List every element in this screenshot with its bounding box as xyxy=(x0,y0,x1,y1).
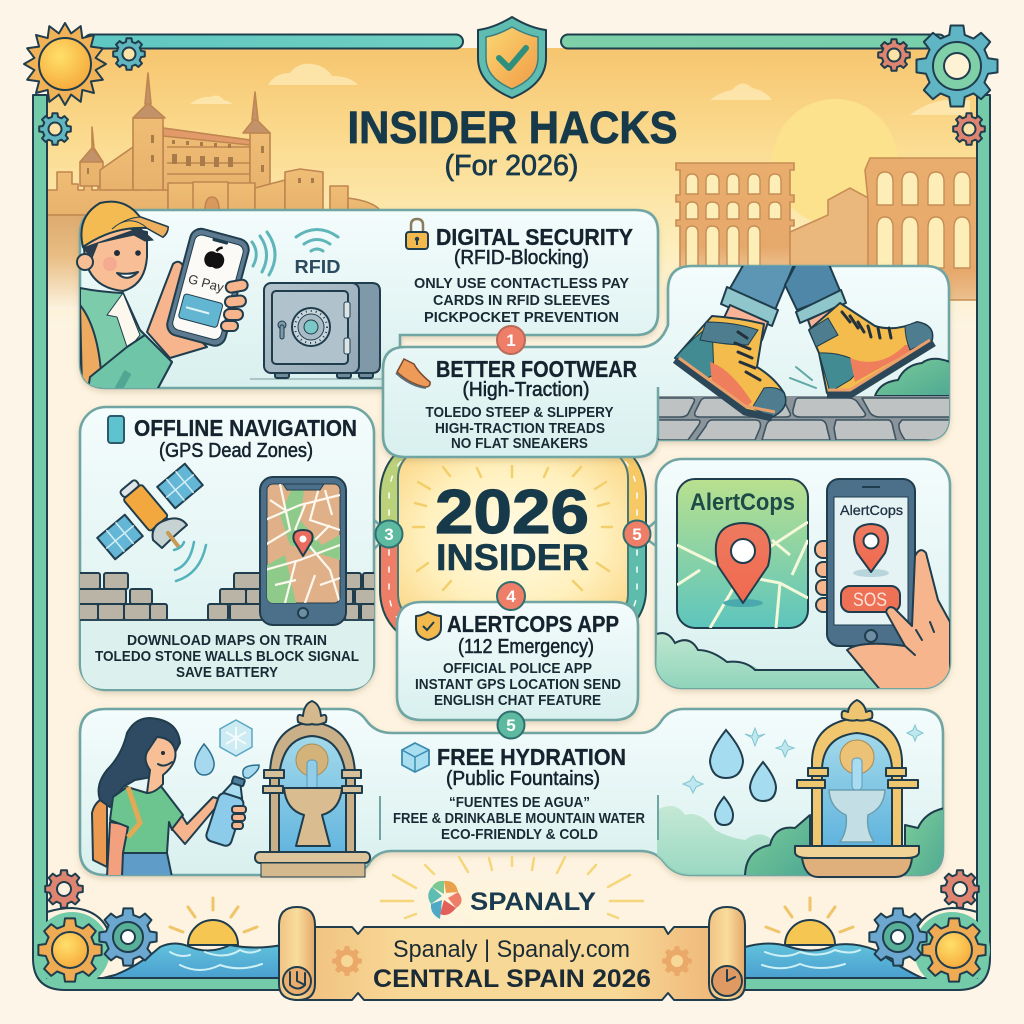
panel: offline navigation xyxy=(78,407,377,690)
apple logo xyxy=(203,244,228,270)
top left bar xyxy=(84,34,463,48)
pinwheel logo xyxy=(428,881,462,919)
pointing hand xyxy=(847,550,950,692)
heading: BETTER FOOTWEAR xyxy=(436,356,637,382)
phone label: AlertCops xyxy=(840,502,903,518)
icon: teal gear top xyxy=(113,38,145,70)
icon: sneaker xyxy=(396,359,430,388)
rays xyxy=(413,466,612,590)
scene: hiking boots on cobblestones xyxy=(655,262,951,442)
lower tint xyxy=(81,620,373,689)
heading: DIGITAL SECURITY xyxy=(436,224,633,250)
title: INSIDER HACKS xyxy=(348,102,678,153)
panel: free hydration xyxy=(80,700,945,877)
panel: center hub xyxy=(389,448,637,632)
body copy: ONLY USE CONTACTLESS PAY xyxy=(414,275,629,292)
body copy: ENGLISH CHAT FEATURE xyxy=(434,692,601,709)
icon: shield check xyxy=(416,612,441,640)
step badge 1 xyxy=(497,326,525,354)
inner cream panel background xyxy=(47,300,977,980)
footer site line: Spanaly | Spanaly.com xyxy=(393,936,630,963)
front boot xyxy=(809,303,932,393)
yellow centre xyxy=(398,448,628,624)
right roll xyxy=(709,907,745,1000)
heading: FREE HYDRATION xyxy=(437,744,626,770)
subtitle: (For 2026) xyxy=(444,150,578,182)
fountain left xyxy=(255,701,370,877)
footer scroll banner xyxy=(279,907,745,1000)
traveler with phone xyxy=(77,202,251,390)
brand name: SPANALY xyxy=(470,888,596,916)
step badge 5 lower xyxy=(498,712,524,738)
gears xyxy=(941,870,979,908)
sparkles xyxy=(683,725,923,793)
panel: alertcops illustration xyxy=(656,459,950,692)
contactless waves xyxy=(252,232,275,275)
backpack xyxy=(92,797,107,867)
RFID label: RFID xyxy=(294,257,340,277)
body copy: FREE & DRINKABLE MOUNTAIN WATER xyxy=(393,810,645,827)
water drops and snow hexagon xyxy=(195,720,259,778)
water bottle xyxy=(205,776,246,847)
face xyxy=(146,737,176,793)
glow and rays xyxy=(377,863,647,947)
Toledo Alcazar castle xyxy=(47,73,380,215)
body copy: DOWNLOAD MAPS ON TRAIN xyxy=(127,632,327,649)
icon: sun top left xyxy=(24,23,106,105)
Segovia aqueduct xyxy=(676,158,977,300)
subheading: (Public Fountains) xyxy=(446,768,600,790)
safe xyxy=(250,283,384,379)
stone walls xyxy=(78,573,377,620)
right arm xyxy=(172,797,222,844)
pin large xyxy=(723,599,763,607)
shirt xyxy=(110,785,183,853)
half sun with rays xyxy=(785,920,835,945)
right bar and bottom right corner xyxy=(720,95,990,990)
heading: OFFLINE NAVIGATION xyxy=(134,415,357,441)
left bar and bottom left corner xyxy=(33,95,300,990)
step badge 5 lower: 5 xyxy=(506,716,516,735)
body copy xyxy=(426,404,614,452)
step badge 4 xyxy=(497,582,525,610)
scroll gears xyxy=(332,946,362,976)
step badge 3: 3 xyxy=(384,525,394,544)
icon: pink gear right xyxy=(953,113,985,145)
step badge 1: 1 xyxy=(506,331,516,350)
phone with map xyxy=(260,477,346,625)
icon: phone xyxy=(108,416,124,443)
icon: pink gear top xyxy=(878,39,910,71)
body copy: ECO-FRIENDLY & COLD xyxy=(441,826,598,843)
heading: ALERTCOPS APP xyxy=(447,611,619,637)
icon: shield xyxy=(478,17,546,98)
step badge 3 xyxy=(374,520,402,549)
head xyxy=(84,222,147,291)
bush xyxy=(875,359,950,396)
body copy: HIGH-TRACTION TREADS xyxy=(435,420,605,437)
panel: alertcops text xyxy=(397,602,638,720)
body copy: TOLEDO STONE WALLS BLOCK SIGNAL xyxy=(95,648,359,665)
RFID signal xyxy=(296,230,338,251)
traveler with bottle xyxy=(92,718,251,877)
top right bar xyxy=(561,34,946,48)
body copy: SAVE BATTERY xyxy=(176,664,278,681)
google pay mark: G Pay xyxy=(187,271,226,295)
body copy: NO FLAT SNEAKERS xyxy=(451,435,588,452)
inner dividers xyxy=(380,795,658,840)
phone with SOS: SOS xyxy=(853,590,887,611)
water xyxy=(103,944,282,978)
big 2026: 2026 xyxy=(435,478,589,547)
rear boot xyxy=(675,316,786,417)
pale bush and garden xyxy=(657,806,780,877)
brand: spanaly logo area xyxy=(377,857,647,947)
subheading: (112 Emergency) xyxy=(458,636,594,658)
cap xyxy=(81,202,168,247)
body copy xyxy=(95,632,359,681)
fountain right xyxy=(795,700,919,877)
icon: ice cube xyxy=(402,743,429,772)
body copy xyxy=(393,794,645,843)
jeans xyxy=(730,266,794,308)
sun behind aqueduct xyxy=(772,99,898,225)
map label: AlertCops xyxy=(690,489,795,516)
impact lines xyxy=(790,367,816,388)
bottom left scene xyxy=(38,870,282,982)
body copy: OFFICIAL POLICE APP xyxy=(443,660,592,677)
signal waves xyxy=(174,542,206,581)
clouds xyxy=(190,64,970,115)
half sun with rays xyxy=(188,920,238,945)
hand and phone xyxy=(147,262,207,358)
left roll xyxy=(279,907,315,1000)
body copy: “FUENTES DE AGUA” xyxy=(449,794,590,811)
step badge 5 right: 5 xyxy=(632,525,642,544)
step badge 5 right xyxy=(624,520,656,548)
body copy: INSTANT GPS LOCATION SEND xyxy=(415,676,621,693)
footer title: CENTRAL SPAIN 2026 xyxy=(373,965,651,993)
step badge 4: 4 xyxy=(506,587,516,606)
gears xyxy=(45,870,83,908)
body copy: TOLEDO STEEP & SLIPPERY xyxy=(426,404,614,421)
left arm xyxy=(107,822,128,876)
skirt xyxy=(122,853,172,877)
map pin xyxy=(293,530,313,556)
subheading: (High-Traction) xyxy=(462,379,590,401)
panel: better footwear xyxy=(383,262,951,457)
panel: digital security xyxy=(77,202,658,390)
body copy xyxy=(415,660,621,709)
subheading: (GPS Dead Zones) xyxy=(159,440,313,462)
satellite xyxy=(97,464,203,559)
subheading: (RFID-Blocking) xyxy=(454,247,589,269)
SOS button xyxy=(841,586,900,612)
icon: teal gear left xyxy=(39,113,71,145)
left ground xyxy=(48,216,84,300)
bottom right scene xyxy=(745,870,986,982)
water xyxy=(745,944,922,978)
icon: large gear top right xyxy=(916,25,998,107)
hair xyxy=(83,228,153,258)
water drops right xyxy=(710,730,776,825)
hair xyxy=(99,718,180,807)
body copy: CARDS IN RFID SLEEVES xyxy=(433,292,610,309)
road ring xyxy=(389,450,637,632)
castle windows xyxy=(87,135,314,183)
phone with SOS xyxy=(815,479,950,692)
icon: padlock xyxy=(406,219,428,249)
body copy: PICKPOCKET PREVENTION xyxy=(424,309,619,326)
map tile xyxy=(677,479,808,628)
cobbles xyxy=(655,396,951,442)
header sky with scenery xyxy=(47,48,978,328)
body copy xyxy=(414,275,629,326)
INSIDER word: INSIDER xyxy=(436,537,589,578)
bush xyxy=(656,633,880,690)
